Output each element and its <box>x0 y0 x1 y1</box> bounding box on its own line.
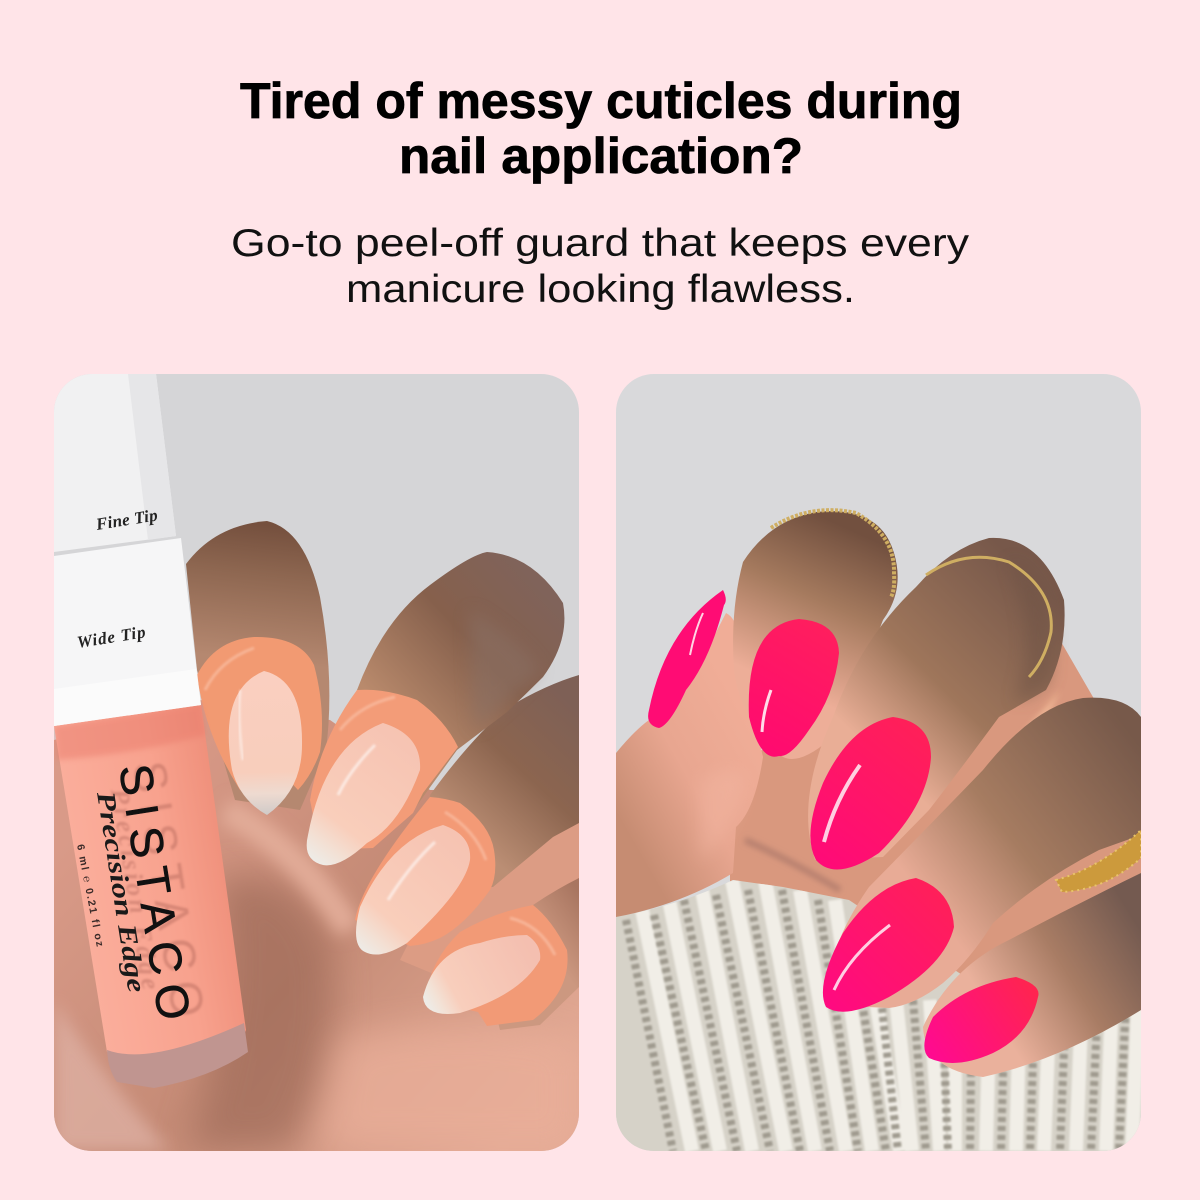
finger 2 <box>808 538 1065 869</box>
tube top shade <box>54 704 206 760</box>
bottle tube <box>54 704 246 1066</box>
sweater gap patch <box>968 930 1035 985</box>
label: product name: Precision Edge <box>91 788 151 994</box>
subtitle <box>231 222 970 311</box>
label: wide tip: Wide Tip <box>76 622 147 652</box>
upper cap <box>54 374 148 552</box>
finger 4 <box>423 878 579 1030</box>
subtitle: Go-to peel-off guard that keeps every <box>231 222 970 265</box>
finger 2 <box>307 552 564 865</box>
subtitle: manicure looking flawless. <box>346 268 855 311</box>
label: fine tip: Fine Tip <box>94 505 159 534</box>
product bottle <box>54 374 248 1088</box>
finger 4 <box>923 873 1141 1077</box>
panel: before photo with peel-off guard <box>54 374 579 1151</box>
gold rings <box>771 510 1051 677</box>
sweater <box>616 870 1141 1151</box>
finger 1 <box>186 521 329 815</box>
guard texture <box>205 648 555 955</box>
panel: after photo with pink nails <box>616 374 1141 1151</box>
finger 1 <box>733 511 898 759</box>
ring: gold band <box>1056 830 1141 892</box>
lower cap <box>54 538 201 726</box>
bottle glass base <box>107 1023 248 1088</box>
title <box>240 73 962 184</box>
label shadow: SISTACO <box>123 757 215 1020</box>
title: nail application? <box>399 128 803 184</box>
thumb <box>616 590 763 917</box>
title: Tired of messy cuticles during <box>240 73 962 129</box>
palm behind <box>730 640 1141 1000</box>
finger 3 <box>823 698 1141 1012</box>
label: brand: SISTACO <box>109 760 201 1023</box>
finger 3 <box>355 675 579 955</box>
label: volume: 6 ml ℮ 0.21 fl oz <box>74 843 106 948</box>
label shadow: Precision Edge <box>105 785 165 991</box>
palm <box>54 700 579 1151</box>
